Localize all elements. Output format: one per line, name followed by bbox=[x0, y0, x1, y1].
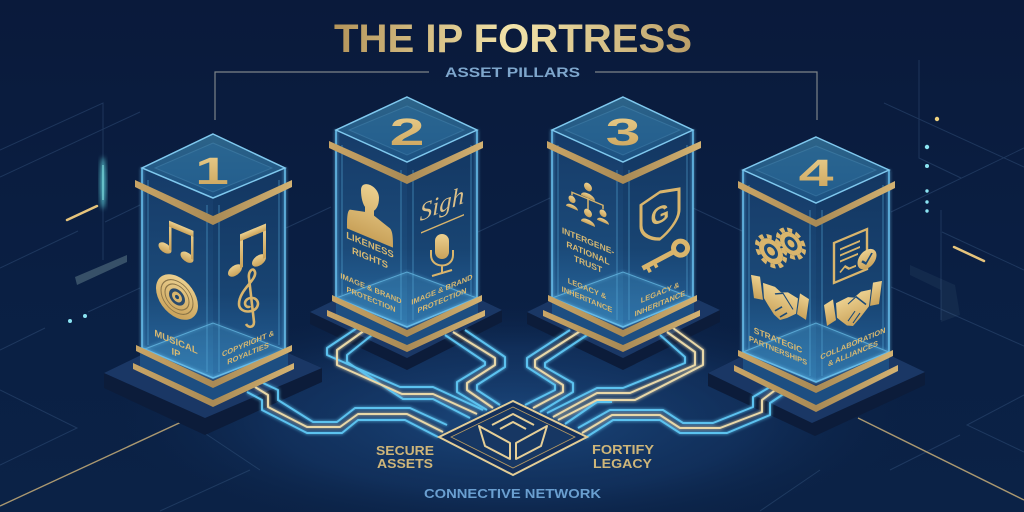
central hub diamond bbox=[439, 401, 587, 475]
pillar 2 gold collars bbox=[327, 141, 485, 352]
label: secure assets: ASSETS bbox=[377, 457, 433, 471]
subtitle bracket: asset pillars bbox=[215, 65, 817, 120]
label: collaboration and alliances: & ALLIANCES bbox=[828, 339, 878, 368]
label: copyright and royalties: ROYALTIES bbox=[227, 341, 269, 367]
panel: pillar 3 intergenerational trust bbox=[543, 97, 701, 352]
label: fortify legacy bbox=[592, 443, 655, 471]
icon: family tree bbox=[566, 174, 609, 233]
label: intergenerational trust: INTERGENE- bbox=[562, 225, 614, 257]
subtitle bracket: asset pillars: ASSET PILLARS bbox=[445, 65, 580, 80]
panel: pillar 2 likeness rights bbox=[327, 97, 485, 352]
label: legacy and inheritance right: INHERITANCE bbox=[635, 289, 685, 319]
pillar 1 glass body bbox=[140, 134, 288, 405]
label: strategic partnerships: PARTNERSHIPS bbox=[749, 334, 807, 367]
label: secure assets bbox=[376, 444, 434, 471]
label: secure assets: SECURE bbox=[376, 444, 434, 458]
panel: pillar 1 musical IP bbox=[133, 134, 294, 407]
label: likeness rights: LIKENESS bbox=[346, 230, 394, 261]
pillar 4 number: 4 bbox=[799, 152, 834, 194]
label: collaboration and alliances: COLLABORATION bbox=[820, 325, 886, 362]
pillar 4 gold collars bbox=[734, 181, 898, 412]
pillar 1 gold collars bbox=[133, 180, 294, 407]
icon: shield with letter G: G bbox=[651, 198, 669, 233]
icon: shield with letter G bbox=[641, 184, 679, 247]
label: fortify legacy: LEGACY bbox=[593, 457, 653, 471]
label: legacy and inheritance left: INHERITANCE bbox=[562, 285, 612, 315]
connective network traces bbox=[247, 328, 785, 438]
label: image and brand protection right: IMAGE & BRAND bbox=[411, 272, 473, 307]
label: image and brand protection right: PROTECTION bbox=[417, 286, 467, 315]
icon: signed document bbox=[834, 225, 876, 283]
label: likeness rights: RIGHTS bbox=[352, 246, 388, 272]
panel: pillar 4 strategic partnerships bbox=[734, 137, 898, 412]
pillar 2 number: 2 bbox=[390, 111, 424, 153]
pillar 3 gold collars bbox=[543, 141, 701, 352]
label: legacy and inheritance left: LEGACY & bbox=[568, 276, 607, 301]
icon: treble clef bbox=[239, 270, 258, 327]
title: THE IP FORTRESS bbox=[334, 17, 692, 61]
pillar 2 glass body bbox=[336, 97, 478, 350]
label: legacy and inheritance right: LEGACY & bbox=[641, 280, 680, 305]
pillar 4 glass body bbox=[743, 137, 889, 408]
icon: vinyl disc bbox=[156, 267, 198, 327]
label: connective network: CONNECTIVE NETWORK bbox=[424, 486, 602, 501]
icon: person silhouette bbox=[347, 175, 393, 248]
label: image and brand protection left: IMAGE & BRAND bbox=[340, 271, 402, 306]
label: copyright and royalties: COPYRIGHT & bbox=[222, 328, 274, 359]
label: intergenerational trust: RATIONAL bbox=[566, 239, 610, 267]
label: fortify legacy: FORTIFY bbox=[592, 443, 655, 457]
icon: key bbox=[639, 239, 690, 275]
label: intergenerational trust: TRUST bbox=[574, 253, 603, 275]
icon: handshake right bbox=[824, 279, 882, 338]
icon: microphone bbox=[431, 234, 453, 276]
label: intergenerational trust bbox=[562, 225, 614, 280]
icon: beamed note bbox=[158, 216, 194, 265]
pillar 3 glass body bbox=[552, 97, 694, 350]
label: strategic partnerships: STRATEGIC bbox=[754, 325, 803, 355]
icon: signature: Sigh bbox=[420, 181, 464, 227]
label: musical IP: MUSICAL bbox=[154, 328, 198, 357]
base slabs bbox=[104, 265, 925, 436]
label: musical IP: IP bbox=[172, 346, 181, 361]
label: image and brand protection left: PROTECTION bbox=[346, 285, 396, 314]
icon: handshake left bbox=[751, 273, 809, 332]
pillar 3 number: 3 bbox=[606, 111, 640, 153]
icon: large note bbox=[228, 223, 266, 279]
icon: gears bbox=[757, 216, 804, 279]
pillar 1 number: 1 bbox=[195, 150, 229, 192]
label: likeness rights bbox=[346, 230, 394, 274]
